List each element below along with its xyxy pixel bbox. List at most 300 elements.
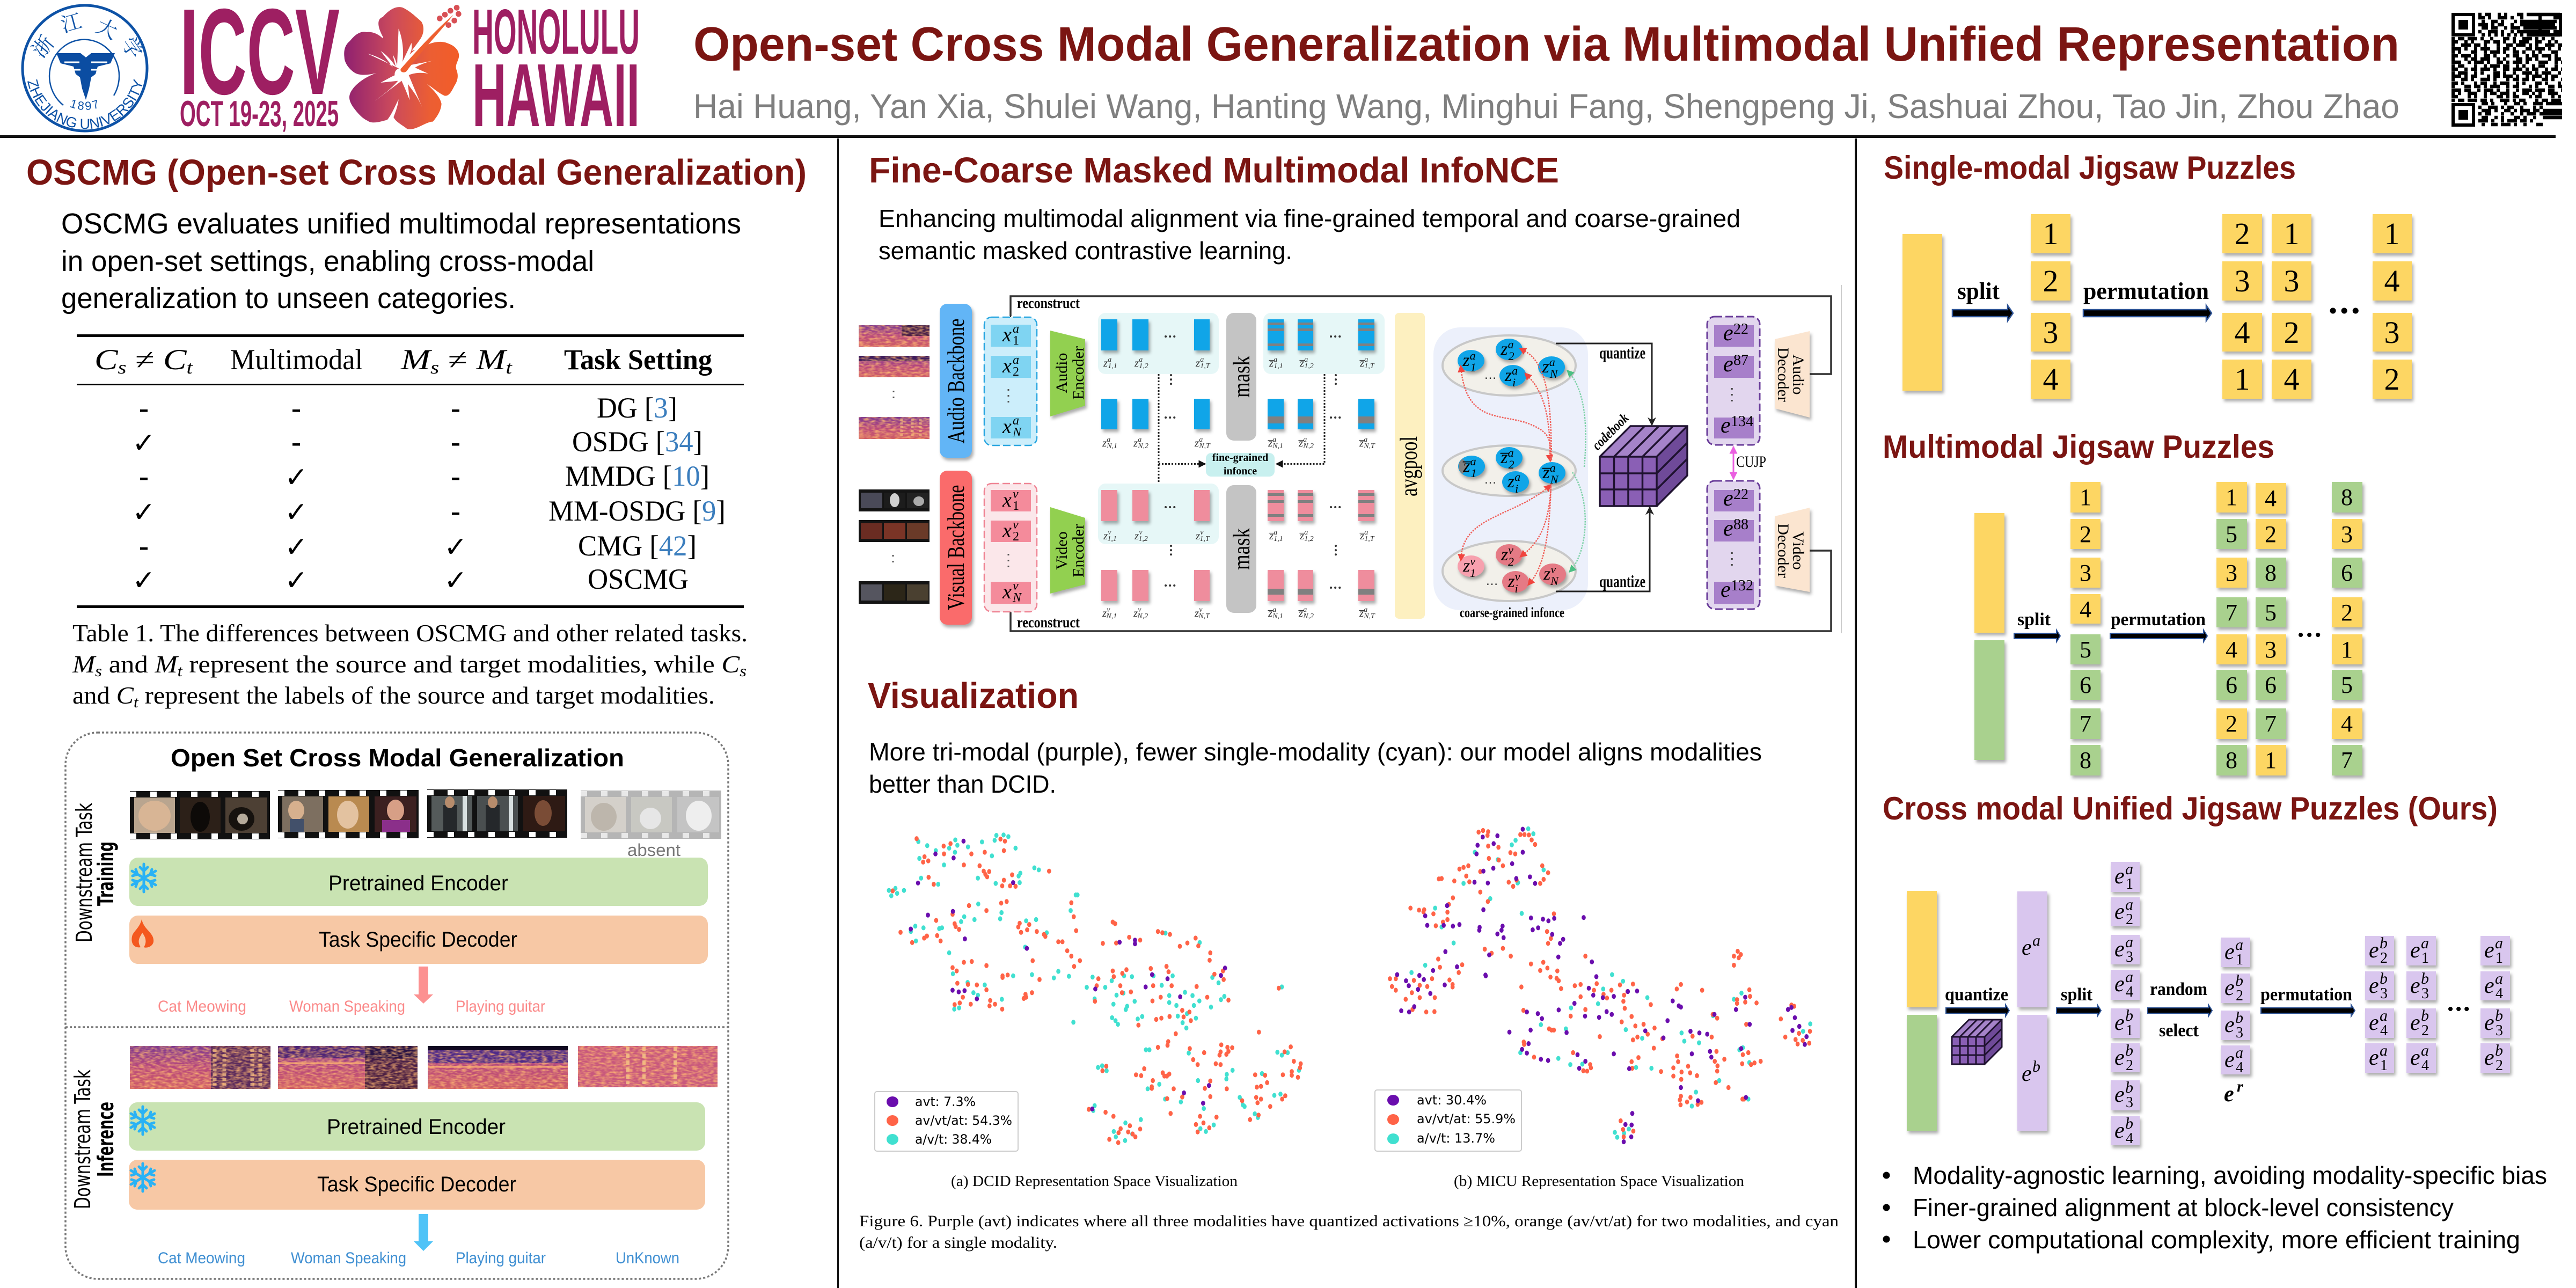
latent token labels: z̅ bbox=[1359, 436, 1364, 449]
latent token labels: 1,1 bbox=[1108, 362, 1117, 370]
quantize arrows bbox=[1556, 343, 1652, 591]
latent token labels bbox=[1102, 356, 1375, 620]
tile column: selected tokens: b bbox=[2235, 972, 2243, 990]
tile column: permutation 2: 2 bbox=[2284, 315, 2299, 350]
tile column: permutation n: 2 bbox=[2341, 599, 2353, 626]
audio token stack: N bbox=[1012, 426, 1022, 440]
coarse-grained tokens: video: z bbox=[1501, 545, 1508, 565]
tile column: permutation 1: e bbox=[2369, 1045, 2379, 1070]
tile column: permutation 2: 1 bbox=[2265, 747, 2277, 773]
video input film strips bbox=[859, 489, 930, 604]
tile column: split tokens: e bbox=[2114, 937, 2125, 962]
latent token labels: N,2 bbox=[1137, 442, 1148, 450]
codebook cube: codebook bbox=[1589, 410, 1632, 453]
tile column: split tokens: 2 bbox=[2126, 911, 2133, 928]
coarse-grained tokens: masked bbox=[1458, 446, 1565, 495]
latent token labels: a bbox=[1107, 436, 1110, 444]
audio token stack: 2 bbox=[1013, 365, 1019, 379]
caption: DCID: (a) DCID Representation Space Visualization bbox=[951, 1173, 1238, 1190]
tile column: permutation 2: 2 bbox=[2265, 521, 2277, 547]
visual backbone bbox=[940, 471, 972, 625]
tile column: split tokens: 2 bbox=[2126, 1057, 2133, 1074]
latent token labels: z̅ bbox=[1269, 356, 1274, 369]
coarse-grained tokens: video bbox=[1458, 543, 1566, 595]
tile column: split tokens: a bbox=[2125, 896, 2133, 913]
latent token labels: z bbox=[1195, 606, 1199, 619]
latent token labels: z bbox=[1196, 356, 1200, 369]
tile column: permutation 2: 6 bbox=[2265, 672, 2277, 698]
coarse-grained tokens: video: N bbox=[1550, 574, 1559, 588]
label: e^r: e bbox=[2224, 1082, 2234, 1107]
tile column: permutation n: 3 bbox=[2496, 1022, 2503, 1039]
latent token labels: 1,T bbox=[1200, 362, 1211, 370]
label: absent: absent bbox=[627, 840, 680, 860]
tile column: selected tokens: e bbox=[2224, 940, 2235, 964]
arrow: split bbox=[2014, 630, 2060, 642]
logo: ICCV Honolulu Hawaii bbox=[180, 0, 640, 145]
table: task comparison: OSDG [34] bbox=[572, 426, 702, 458]
audio decoder bbox=[1774, 331, 1810, 418]
logo: ICCV Honolulu Hawaii: HAWAII bbox=[472, 46, 640, 145]
mask block (video): mask bbox=[1228, 528, 1255, 570]
video token stack: x bbox=[1002, 581, 1012, 603]
latent token labels: z bbox=[1135, 356, 1139, 369]
coarse-grained tokens: audio: … bbox=[1484, 368, 1497, 382]
tile column: permutation 2 bbox=[2272, 214, 2311, 399]
latent token labels: v bbox=[1139, 529, 1143, 537]
reconstruct labels: reconstruct bbox=[1017, 295, 1080, 312]
tile column: selected tokens: a bbox=[2235, 1044, 2243, 1062]
tile column: split tokens: 4 bbox=[2126, 984, 2133, 1000]
tile column: permutation n: 7 bbox=[2341, 747, 2353, 773]
audio codebook tokens: e bbox=[1723, 321, 1733, 346]
panel: cross modal unified jigsaw puzzles bbox=[1883, 791, 2547, 1254]
latent token labels: 1,1 bbox=[1274, 362, 1283, 370]
tile column: split: 7 bbox=[2080, 711, 2091, 737]
audio codebook tokens: 22 bbox=[1733, 321, 1748, 338]
audio encoder bbox=[1050, 331, 1087, 416]
coarse-grained tokens: masked: z̅ bbox=[1463, 456, 1470, 476]
audio input spectrograms bbox=[859, 325, 930, 439]
fine-grained infonce box bbox=[1206, 452, 1275, 477]
logo: Zhejiang University: 浙 bbox=[28, 32, 58, 62]
film strip: cat bbox=[130, 791, 270, 839]
coarse-grained tokens: audio bbox=[1458, 338, 1565, 389]
tile column: split: 1 bbox=[2043, 216, 2059, 251]
table: task comparison: CMG [42] bbox=[578, 530, 697, 562]
tile column: permutation 2: 3 bbox=[2421, 985, 2429, 1002]
table: task comparison: ✓ bbox=[284, 463, 308, 493]
figure caption: (a/v/t) for a single modality. bbox=[859, 1234, 1057, 1252]
split label: split bbox=[2017, 610, 2051, 630]
audio codebook tokens: e bbox=[1721, 413, 1731, 438]
coarse-grained tokens: audio: 1 bbox=[1470, 361, 1476, 374]
coarse-grained tokens: masked: a bbox=[1508, 446, 1514, 459]
latent token labels: N,1 bbox=[1106, 442, 1117, 450]
icon: QR code bbox=[2451, 13, 2562, 127]
table: task comparison: t bbox=[187, 358, 194, 378]
tile column: permutation n: 3 bbox=[2384, 315, 2400, 350]
logo: Zhejiang University: 大 bbox=[92, 15, 121, 44]
coarse-grained tokens: masked: 2 bbox=[1509, 458, 1514, 471]
icon: snowflake bbox=[131, 1107, 155, 1135]
tile column: permutation n: 6 bbox=[2341, 560, 2353, 586]
latent token labels: a bbox=[1274, 529, 1277, 537]
latent token labels: z̅ bbox=[1268, 606, 1272, 619]
tile column: split: 4 bbox=[2043, 362, 2059, 397]
tile column: permutation 1 bbox=[2365, 934, 2394, 1074]
coarse-grained tokens: audio: i bbox=[1512, 376, 1516, 389]
coarse-grained tokens: video: … bbox=[1485, 574, 1498, 588]
latent token labels: a bbox=[1364, 356, 1368, 364]
arrow: permutation bbox=[2083, 305, 2212, 321]
tile column: permutation 1 bbox=[2222, 214, 2262, 399]
latent token labels: N,T bbox=[1198, 612, 1210, 620]
split label: split bbox=[1957, 278, 2000, 304]
heading: Visualization: Visualization bbox=[868, 676, 1079, 716]
coarse-grained tokens: audio: z bbox=[1501, 339, 1508, 359]
logo: Zhejiang University: 学 bbox=[116, 33, 147, 63]
label: downstream task training: Training bbox=[93, 841, 119, 906]
panel: visualization bbox=[859, 676, 1839, 1252]
tile column: selected tokens: a bbox=[2235, 936, 2243, 954]
unified bars: e bbox=[2022, 935, 2032, 960]
figure heading: Open Set Cross Modal Generalization bbox=[171, 744, 624, 772]
tile column: split: 6 bbox=[2080, 672, 2091, 698]
table: task comparison: - bbox=[139, 460, 149, 492]
audio token stack: x bbox=[1002, 355, 1012, 377]
scatter: DCID bbox=[889, 835, 1301, 1143]
video encoder: Video bbox=[1053, 531, 1071, 570]
video token stack: v bbox=[1013, 518, 1019, 532]
video token stack: 2 bbox=[1013, 530, 1019, 544]
quantize labels bbox=[1599, 343, 1645, 591]
tile column: permutation n: b bbox=[2495, 1042, 2503, 1059]
tile column: permutation 2: b bbox=[2421, 970, 2429, 987]
latent token labels: z bbox=[1135, 529, 1139, 542]
legend: MICU: av/vt/at: 55.9% bbox=[1417, 1111, 1516, 1126]
panel: OSCMG definition bbox=[26, 152, 807, 711]
latent token labels: N,T bbox=[1198, 442, 1211, 450]
latent token labels: N,T bbox=[1363, 442, 1375, 450]
coarse-grained tokens: video: v bbox=[1470, 554, 1475, 568]
latent token labels: a bbox=[1364, 529, 1368, 537]
tile column: permutation n: 3 bbox=[2341, 521, 2353, 547]
tile column: permutation 2: 4 bbox=[2284, 362, 2299, 397]
table: task comparison: ✓ bbox=[132, 497, 156, 528]
tile column: permutation 2: 3 bbox=[2265, 636, 2277, 663]
masked audio blocks bbox=[1268, 319, 1374, 429]
labels: inference classes: Cat Meowing bbox=[158, 1249, 245, 1267]
input bars bbox=[1974, 513, 2004, 760]
tile column: split: 1 bbox=[2080, 484, 2091, 510]
text block: InfoNCE summary bbox=[879, 204, 1740, 265]
table: task comparison: - bbox=[291, 426, 301, 458]
tile column: permutation n: e bbox=[2484, 938, 2494, 963]
table: task comparison: - bbox=[139, 530, 149, 562]
legend: DCID: avt: 7.3% bbox=[915, 1094, 976, 1109]
tile column: permutation 1: b bbox=[2380, 970, 2388, 987]
latent token labels: N,2 bbox=[1302, 442, 1314, 450]
arrow: inference output bbox=[414, 1214, 433, 1251]
tile column: permutation 1: 4 bbox=[2235, 315, 2250, 350]
latent token labels: N,1 bbox=[1106, 612, 1117, 620]
latent token labels: v bbox=[1199, 606, 1203, 614]
reconstruct loop lines bbox=[1011, 296, 1831, 631]
coarse-grained tokens: video: v bbox=[1508, 543, 1513, 557]
table: task comparison: - bbox=[451, 426, 460, 458]
tile column: permutation n: 4 bbox=[2341, 711, 2353, 737]
coarse-grained tokens: audio: z bbox=[1505, 365, 1512, 385]
video token stack: v bbox=[1013, 579, 1019, 593]
tile column: split tokens: e bbox=[2114, 1011, 2125, 1035]
coarse-grained tokens: video: z bbox=[1543, 564, 1550, 584]
coarse-grained label: coarse-grained infonce bbox=[1460, 605, 1564, 620]
tile column: permutation 1: 4 bbox=[2380, 1022, 2388, 1039]
table: task comparison: Task Setting bbox=[564, 343, 712, 376]
tile column: permutation n: 4 bbox=[2496, 985, 2503, 1002]
table caption: represent the labels of the source and target modalities. bbox=[138, 682, 715, 709]
latent token labels: v bbox=[1107, 606, 1110, 614]
tile column: split: 2 bbox=[2043, 264, 2059, 298]
legend: MICU bbox=[1375, 1090, 1521, 1151]
text block: OSCMG summary: OSCMG evaluates unified multimodal representations bbox=[61, 208, 741, 240]
tile column: permutation 1: 3 bbox=[2380, 985, 2388, 1002]
latent token labels: a bbox=[1303, 436, 1307, 444]
coarse-grained tokens: masked: 1 bbox=[1471, 466, 1477, 480]
coarse-grained tokens: masked: N bbox=[1550, 473, 1559, 486]
coarse-grained tokens: video: v bbox=[1550, 562, 1556, 576]
film strip: absent dog bbox=[581, 791, 721, 839]
video codebook tokens: 88 bbox=[1733, 516, 1748, 533]
coarse-grained tokens: audio: a bbox=[1508, 338, 1514, 351]
arrow: CUJP bbox=[1732, 447, 1735, 479]
table: task comparison: ✓ bbox=[444, 532, 467, 563]
table caption: M bbox=[154, 650, 179, 678]
block: task specific decoder (training) bbox=[129, 916, 708, 964]
tile column: permutation n: e bbox=[2484, 1011, 2494, 1035]
tile column: selected tokens: e bbox=[2224, 976, 2235, 1000]
video token stack bbox=[984, 484, 1037, 612]
audio codebook tokens: 87 bbox=[1733, 352, 1748, 369]
tile column: split tokens: b bbox=[2125, 1079, 2133, 1096]
split label: split bbox=[2061, 985, 2093, 1005]
audio token stack: a bbox=[1013, 322, 1019, 336]
tile column: permutation 1: 3 bbox=[2226, 560, 2237, 586]
video codebook tokens: 132 bbox=[1731, 577, 1753, 594]
bullet list: benefits: Finer-grained alignment at block-level consistency bbox=[1913, 1194, 2454, 1221]
coarse-grained tokens: masked: … bbox=[1484, 472, 1497, 487]
table: task comparison: - bbox=[451, 495, 460, 527]
table: task comparison: M bbox=[400, 343, 433, 376]
latent token labels: N,2 bbox=[1302, 612, 1314, 620]
latent token labels: z̅ bbox=[1299, 436, 1303, 449]
latent token labels: N,T bbox=[1363, 612, 1375, 620]
tile column: permutation n bbox=[2332, 482, 2362, 775]
scatter: MICU bbox=[1390, 829, 1810, 1142]
coarse-grained tokens: masked: z̅ bbox=[1501, 448, 1508, 467]
coarse-grained tokens: masked: i bbox=[1515, 482, 1518, 495]
table: task comparison: Multimodal bbox=[230, 343, 363, 376]
table: task comparison: M bbox=[475, 343, 508, 376]
coarse-grained tokens: masked: a bbox=[1514, 470, 1520, 484]
latent token labels: 1,T bbox=[1364, 362, 1375, 370]
legend: MICU: a/v/t: 13.7% bbox=[1417, 1131, 1495, 1146]
avgpool bbox=[1395, 313, 1425, 619]
block: task specific decoder (inference) bbox=[129, 1160, 705, 1210]
tile column: permutation 2: 4 bbox=[2265, 485, 2277, 511]
table: task comparison: ✓ bbox=[284, 497, 308, 528]
latent token labels: z bbox=[1196, 529, 1200, 542]
tile column: split tokens: e bbox=[2114, 899, 2125, 924]
tile column: permutation 1: 4 bbox=[2226, 636, 2237, 663]
tile column: permutation 2: e bbox=[2410, 1045, 2420, 1070]
text block: OSCMG summary: in open-set settings, enabling cross-modal bbox=[61, 245, 594, 277]
table: task comparison: MMDG [10] bbox=[565, 460, 709, 492]
legend: DCID bbox=[875, 1092, 1018, 1151]
tile column: permutation n: e bbox=[2484, 974, 2494, 998]
tile column: split bbox=[2031, 214, 2070, 399]
tile column: permutation n: 8 bbox=[2341, 484, 2353, 510]
tile column: permutation 2: 1 bbox=[2421, 950, 2429, 967]
video token stack: 1 bbox=[1013, 499, 1019, 513]
logo: ICCV Honolulu Hawaii: OCT 19-23, 2025 bbox=[180, 93, 339, 134]
tile column: permutation 1: 1 bbox=[2226, 484, 2237, 510]
block: task specific decoder (inference): Task Specific Decoder bbox=[317, 1173, 516, 1196]
column divider right bbox=[1855, 138, 1857, 1288]
table: task comparison: DG [3] bbox=[597, 392, 677, 424]
coarse-grained tokens: video: z bbox=[1463, 556, 1470, 576]
video token stack: v bbox=[1013, 487, 1019, 501]
random select labels bbox=[2150, 979, 2207, 1041]
tile column: permutation n bbox=[2480, 934, 2510, 1074]
tile column: split tokens: e bbox=[2114, 1118, 2125, 1143]
tile column: permutation 1: 2 bbox=[2235, 216, 2250, 251]
table caption: Table 1. The differences between OSCMG and other related tasks. bbox=[72, 619, 748, 647]
coarse-grained tokens: audio: a bbox=[1512, 364, 1518, 377]
video codebook tokens: 22 bbox=[1733, 486, 1748, 503]
tile column: permutation n: e bbox=[2484, 1045, 2494, 1070]
label: downstream task inference: Downstream Task bbox=[70, 1070, 96, 1209]
tile column: permutation 1: e bbox=[2369, 938, 2379, 963]
table caption: M bbox=[72, 650, 97, 678]
visual backbone: Visual Backbone bbox=[943, 485, 969, 610]
contrastive curves bbox=[1461, 351, 1586, 581]
reconstruct labels: reconstruct bbox=[1017, 614, 1080, 631]
table: task comparison: s bbox=[118, 358, 127, 378]
label: CUJP: CUJP bbox=[1736, 453, 1766, 471]
ellipsis dots bbox=[1166, 336, 1344, 588]
video decoder: Decoder bbox=[1774, 523, 1792, 578]
spectrograms: inference inputs bbox=[130, 1046, 718, 1089]
tile column: permutation 1: a bbox=[2380, 1007, 2388, 1024]
latent token labels: z bbox=[1195, 436, 1199, 449]
audio token stack: 1 bbox=[1013, 334, 1019, 348]
tile column: permutation 1: 7 bbox=[2226, 599, 2237, 626]
latent token labels: 1,T bbox=[1364, 535, 1375, 543]
labels: inference classes: UnKnown bbox=[616, 1249, 679, 1267]
video encoder: Encoder bbox=[1070, 524, 1087, 577]
latent token labels: z̅ bbox=[1268, 436, 1272, 449]
tile column: selected tokens: 4 bbox=[2236, 1059, 2243, 1076]
table caption: and bbox=[102, 650, 155, 678]
coarse-grained tokens: masked: a bbox=[1550, 461, 1556, 474]
tile column: selected tokens: 3 bbox=[2236, 1024, 2243, 1041]
tile column: permutation 1: e bbox=[2369, 1011, 2379, 1035]
tile column: permutation 2: e bbox=[2410, 1011, 2420, 1035]
latent token labels: 1,2 bbox=[1304, 535, 1314, 543]
text block: OSCMG summary bbox=[61, 208, 741, 314]
mask block (audio) bbox=[1226, 313, 1256, 441]
icon: snowflake bbox=[131, 1163, 155, 1191]
tile column: permutation 2: e bbox=[2410, 974, 2420, 998]
permutation label: permutation bbox=[2260, 985, 2352, 1005]
tile column: permutation 1: 3 bbox=[2235, 264, 2250, 298]
icon: flame bbox=[131, 919, 153, 948]
tile column: split tokens: b bbox=[2125, 1115, 2133, 1132]
audio decoder: Decoder bbox=[1774, 347, 1792, 402]
coarse-grained tokens: audio: a bbox=[1549, 355, 1555, 369]
tile column: permutation 2: 2 bbox=[2421, 1022, 2429, 1039]
arrow: split bbox=[1952, 305, 2013, 321]
fine-grained infonce connectors bbox=[1159, 374, 1324, 484]
table: task comparison: ✓ bbox=[444, 566, 467, 596]
table caption: t bbox=[134, 693, 138, 711]
audio token stack: a bbox=[1013, 353, 1019, 367]
panel: single-modal jigsaw puzzles bbox=[1884, 150, 2412, 399]
heading: OSCMG: OSCMG (Open-set Cross Modal Generalization) bbox=[26, 152, 807, 193]
arrow: random select bbox=[2148, 1005, 2212, 1016]
table: task comparison: ✓ bbox=[284, 566, 308, 596]
tile column: permutation 1: 5 bbox=[2226, 521, 2237, 547]
latent token labels: a bbox=[1364, 606, 1367, 614]
panel: multimodal jigsaw puzzles bbox=[1883, 429, 2362, 775]
tile column: split bbox=[2070, 482, 2101, 775]
tile column: permutation n: 5 bbox=[2341, 672, 2353, 698]
latent token labels: N,2 bbox=[1137, 612, 1148, 620]
block: pretrained encoder (training): Pretrained Encoder bbox=[328, 872, 508, 895]
block: pretrained encoder (inference) bbox=[129, 1102, 705, 1151]
labels: training classes: Playing guitar bbox=[456, 998, 545, 1015]
coarse-grained tokens: audio: 2 bbox=[1509, 349, 1514, 363]
coarse-grained tokens: video: i bbox=[1514, 582, 1518, 595]
table: task comparison: MM-OSDG [9] bbox=[548, 495, 726, 527]
latent token labels: z̅ bbox=[1300, 356, 1304, 369]
tile column: permutation n: 1 bbox=[2341, 636, 2353, 663]
labels: inference classes: Playing guitar bbox=[456, 1249, 546, 1267]
permutation label: permutation bbox=[2111, 610, 2206, 630]
codebook cube bbox=[1952, 1020, 2002, 1064]
tile column: split tokens: 4 bbox=[2126, 1130, 2133, 1147]
tile column: split tokens: 1 bbox=[2126, 876, 2133, 892]
audio encoder: Encoder bbox=[1070, 346, 1087, 400]
latent token labels: z bbox=[1133, 436, 1138, 449]
tile column: permutation 2 bbox=[2256, 483, 2286, 775]
title: Open-set Cross Modal Generalization via Multimodal Unified Representation bbox=[693, 18, 2399, 71]
coarse-grained tokens: masked: z bbox=[1507, 472, 1514, 492]
label: downstream task training bbox=[71, 803, 119, 942]
text block: InfoNCE summary: semantic masked contrastive learning. bbox=[879, 237, 1292, 265]
avgpool: avgpool bbox=[1395, 436, 1422, 496]
film strip: guitar bbox=[427, 789, 567, 838]
table caption bbox=[72, 619, 748, 711]
label: e^r: r bbox=[2237, 1078, 2243, 1095]
tile column: split tokens: b bbox=[2125, 1007, 2133, 1024]
coarse-grained tokens: audio: a bbox=[1470, 349, 1476, 362]
heading: multimodal: Multimodal Jigsaw Puzzles bbox=[1883, 429, 2274, 465]
table: task comparison: t bbox=[506, 358, 513, 378]
audio latent blocks bbox=[1101, 319, 1210, 429]
